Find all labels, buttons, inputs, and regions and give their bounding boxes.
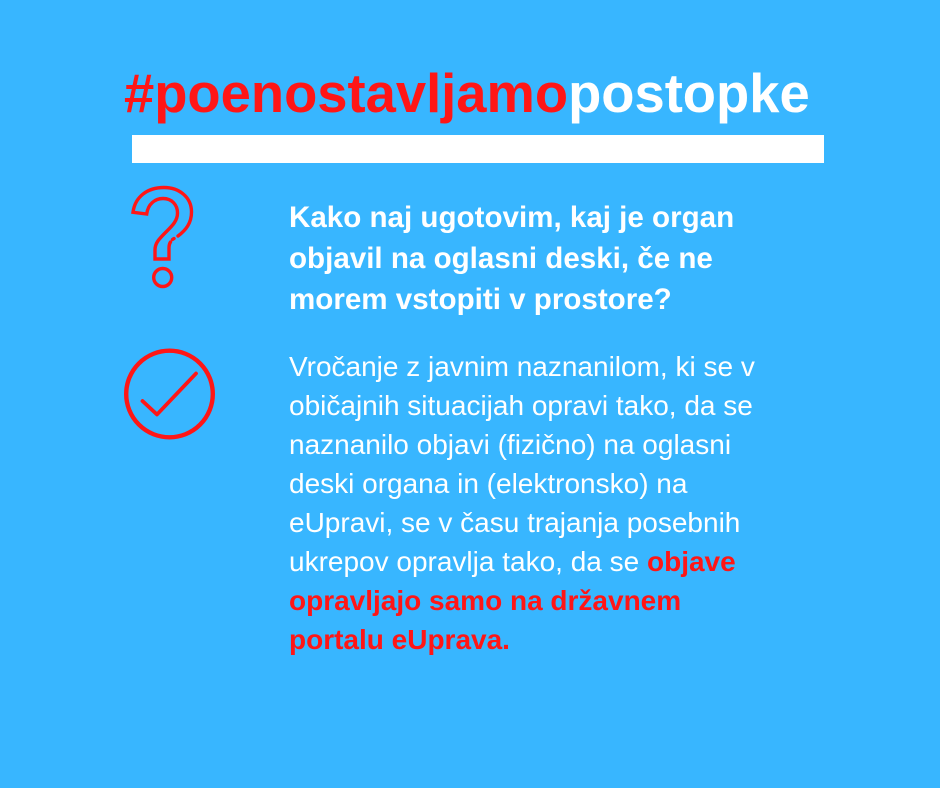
answer text: Vročanje z javnim naznanilom, ki se v	[289, 351, 755, 382]
answer text	[289, 351, 755, 655]
white title bar	[132, 134, 824, 163]
question text: objavil na oglasni deski, če ne	[289, 242, 713, 275]
answer text: opravljajo samo na državnem	[289, 585, 681, 616]
answer text: naznanilo objavi (fizično) na oglasni	[289, 429, 731, 460]
answer text: ukrepov opravlja tako, da se objave	[289, 546, 736, 577]
answer text: portalu eUprava.	[289, 624, 510, 655]
question text: morem vstopiti v prostore?	[289, 283, 672, 316]
answer text: deski organa in (elektronsko) na	[289, 468, 687, 499]
question text: Kako naj ugotovim, kaj je organ	[289, 201, 734, 234]
title: #poenostavljamopostopke	[124, 63, 810, 124]
answer text: običajnih situacijah opravi tako, da se	[289, 390, 753, 421]
question text	[289, 201, 734, 316]
answer text: eUpravi, se v času trajanja posebnih	[289, 507, 740, 538]
